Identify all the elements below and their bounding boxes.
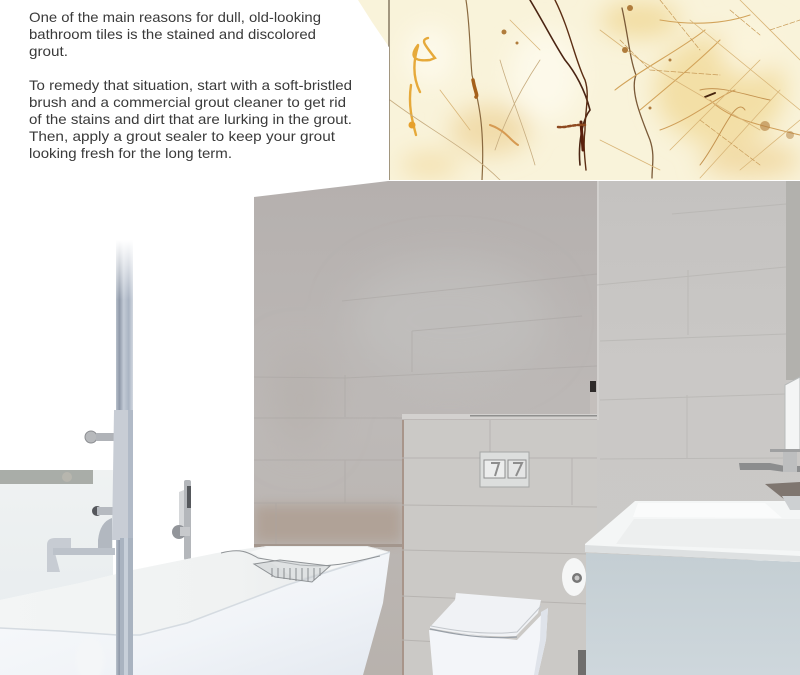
- golden blotches: [400, 2, 800, 179]
- marble tile photo: [350, 0, 800, 180]
- flush plate: [480, 452, 529, 487]
- left wall: [254, 180, 597, 675]
- article text: of the stains and dirt that are lurking in the grout.: [29, 112, 352, 127]
- half-wall partition: [402, 420, 597, 675]
- shower hinge knob: [85, 431, 114, 443]
- sink faucet: [739, 449, 800, 510]
- freestanding bathtub: [0, 546, 390, 675]
- shower niche bottle: [590, 381, 596, 396]
- left wall tile joints: [254, 274, 597, 504]
- brown speckles: [408, 5, 794, 139]
- vanity cabinet: [586, 553, 800, 675]
- article text: bathroom tiles is the stained and discolored: [29, 27, 316, 42]
- bath filler and wall spout: [47, 506, 115, 572]
- article text: [29, 10, 352, 161]
- toilet roll: [562, 558, 586, 596]
- article text: brush and a commercial grout cleaner to get rid: [29, 95, 346, 110]
- floor-mounted hand shower: [172, 480, 191, 560]
- brush holder: [578, 650, 586, 675]
- toilet: [429, 593, 548, 675]
- frosted glass band: [0, 470, 93, 484]
- wire bath caddy: [221, 551, 380, 582]
- bathroom walls: [254, 180, 800, 675]
- article text: Then, apply a grout sealer to keep your grout: [29, 129, 335, 144]
- article text: To remedy that situation, start with a soft-bristled: [29, 78, 352, 93]
- article text: grout.: [29, 44, 68, 59]
- mirror: [785, 377, 800, 450]
- vanity counter: [585, 501, 800, 562]
- chrome shower post: [112, 240, 133, 675]
- shower glass panel: [0, 470, 113, 675]
- article text: looking fresh for the long term.: [29, 146, 232, 161]
- veins: [360, 0, 800, 180]
- article text: One of the main reasons for dull, old-looking: [29, 10, 321, 25]
- right wall: [597, 180, 800, 560]
